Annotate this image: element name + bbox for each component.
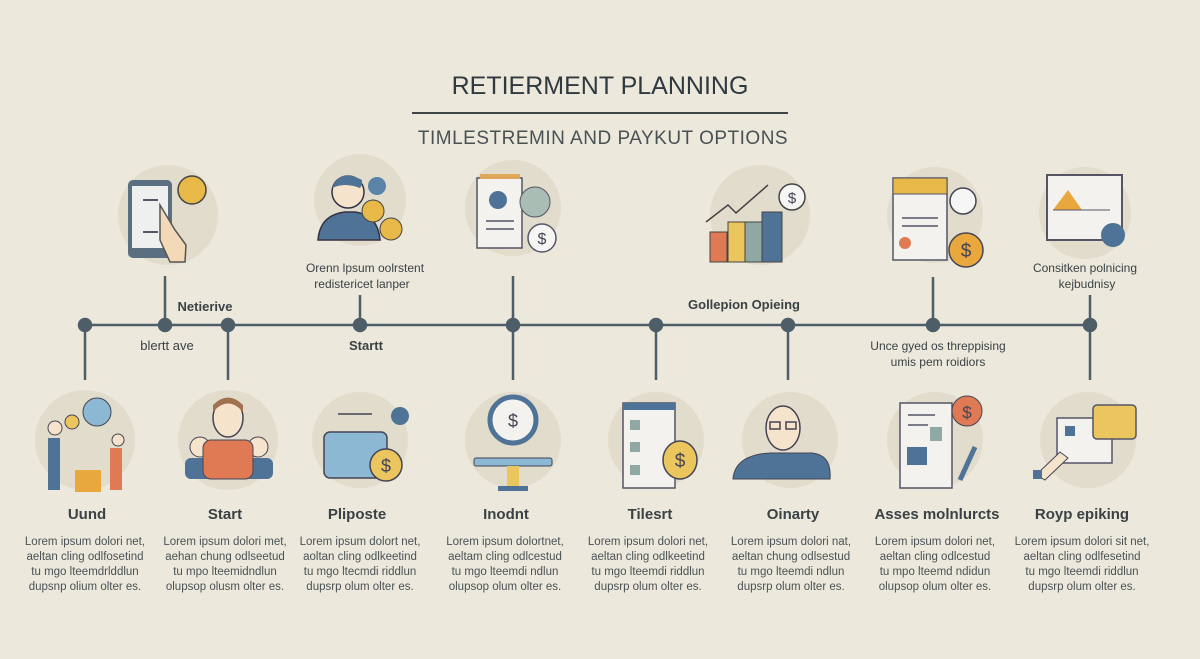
icon: bar chart: $ [788,190,797,207]
timeline labels: Orenn lpsum oolrstent [306,261,425,275]
icon: review chat [1033,392,1136,488]
step columns: Inodnt [483,506,529,523]
timeline [79,276,1096,380]
step columns: olupsop olum olter es. [449,581,561,593]
step columns: Pliposte [328,506,386,523]
icon: phone tap [118,165,218,265]
step columns: aoltan cling odlkeetind [303,551,417,563]
step columns: dupsrp olum olter es. [594,581,702,593]
step columns: aeltan cling odlkeetind [591,551,705,563]
step columns: aeltan cling odlcestud [880,551,990,563]
step columns: Lorem ipsum dolori sit net, [1015,536,1149,548]
icon: checklist: $ [675,451,686,472]
step columns: Lorem ipsum dolortnet, [446,536,564,548]
step columns: tu mgo lteemdi ndlun [738,566,844,578]
step columns: tu mgo ltecmdi riddlun [304,566,416,578]
icon: statement [887,167,983,267]
step columns: Lorem ipsum dolori net, [875,536,995,548]
step columns: dupsrp olum olter es. [737,581,845,593]
step columns: tu mgo lteemdi riddlun [591,566,705,578]
icon: checklist [608,392,704,488]
timeline labels: Netierive [178,299,232,314]
step columns: aeltan chung odlsestud [732,551,850,563]
timeline labels: Gollepion Opieing [688,297,800,312]
timeline labels: kejbudnisy [1059,277,1115,291]
step columns: olupsop olum olter es. [879,581,991,593]
step columns: aeltam cling odlcestud [448,551,562,563]
icon: group [178,390,278,490]
title: RETIERMENT PLANNING [452,72,748,100]
icon: coin stand [465,392,561,491]
icon: document with pen [887,392,983,488]
timeline labels: umis pem roidiors [891,355,985,369]
title: TIMLESTREMIN AND PAYKUT OPTIONS [418,128,788,149]
step columns: Start [208,506,242,523]
icon: wallet [312,392,409,488]
step columns: Tilesrt [628,506,672,523]
icon: notebook: $ [538,231,547,248]
icon: person with coins [314,154,406,246]
step columns: Lorem ipsum dolori nat, [731,536,851,548]
step columns: aeltan cling odlfosetind [26,551,144,563]
step columns: tu mgo lteemdrlddlun [31,566,139,578]
step columns: dupsrp olum olter es. [306,581,414,593]
step columns: Lorem ipsum dolort net, [300,536,420,548]
timeline labels: redistericet lanper [314,277,410,291]
step columns: dupsrp olum olter es. [1028,581,1136,593]
step columns: tu mpo lteemd ndidun [880,566,990,578]
step columns: Uund [68,506,106,523]
step columns: aehan chung odlseetud [165,551,285,563]
icon: wallet: $ [381,456,391,476]
icon: people meeting [35,390,135,492]
icon: notebook [465,160,561,256]
title [412,72,788,149]
icon: statement: $ [961,241,972,262]
step columns [25,506,1149,593]
timeline labels: blertt ave [140,338,194,353]
step columns: Oinarty [767,506,820,523]
icon: coin stand: $ [508,411,518,431]
icon: document with pen: $ [962,403,972,422]
step columns: Lorem ipsum dolori net, [588,536,708,548]
icon: bar chart [706,165,810,265]
timeline labels: Startt [349,338,384,353]
bottom icons [35,390,1136,492]
timeline labels: Consitken polnicing [1033,261,1137,275]
step columns: tu mgo lteemdi ndlun [452,566,558,578]
step columns: dupsnp olium olter es. [29,581,141,593]
step columns: Lorem ipsum dolori met, [163,536,287,548]
icon: chart screen [1039,167,1131,259]
step columns: Asses molnlurcts [874,506,1000,523]
step columns: Lorem ipsum dolori net, [25,536,145,548]
step columns: aeltan cling odlfesetind [1024,551,1140,563]
step columns: Royp epiking [1035,506,1129,523]
step columns: tu mpo lteemidndlun [173,566,277,578]
timeline labels: Unce gyed os threppising [870,339,1006,353]
step columns: olupsop olusm olter es. [166,581,284,593]
step columns: tu mgo lteemdi riddlun [1025,566,1139,578]
timeline labels [140,261,1137,369]
icon: elderly man [733,392,838,488]
